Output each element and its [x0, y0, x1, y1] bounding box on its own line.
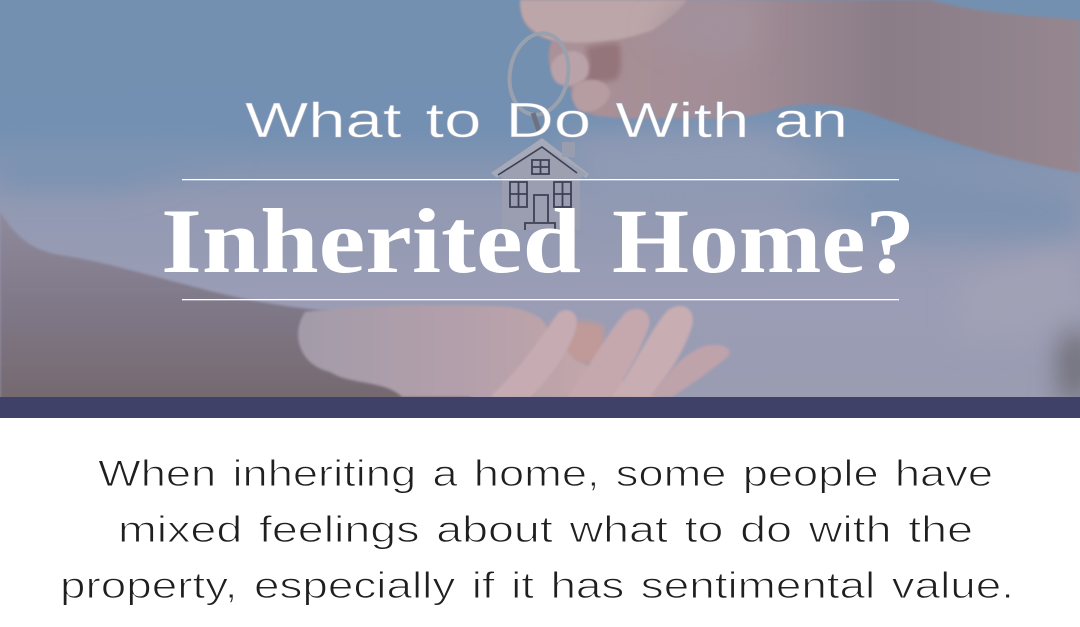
roof line — [498, 147, 577, 175]
index fingertip — [551, 51, 589, 86]
lower finger — [573, 80, 610, 112]
finger four — [650, 345, 729, 397]
lower arm — [0, 212, 480, 400]
house keychain — [491, 138, 589, 230]
open palm — [298, 305, 660, 397]
curled finger shadow — [584, 43, 621, 83]
finger one — [490, 310, 577, 397]
word: Home?: Home? — [612, 190, 915, 292]
accent bar — [0, 397, 1080, 418]
wrist fold highlight — [661, 0, 744, 22]
finger two — [568, 309, 649, 397]
blurred clouds and distant shapes — [0, 125, 1080, 400]
paragraph line two: mixed feelings about what to do with the — [118, 509, 973, 550]
title line two — [161, 190, 915, 292]
door — [534, 195, 548, 222]
intro paragraph — [60, 453, 1014, 606]
chimney — [562, 142, 575, 157]
roof — [491, 138, 589, 178]
paragraph line one: When inheriting a home, some people have — [98, 453, 993, 494]
upper forearm and fist — [521, 0, 1080, 173]
right window — [554, 182, 571, 207]
sky background — [0, 0, 1080, 397]
steps — [525, 223, 555, 230]
top divider — [182, 179, 899, 180]
finger three — [612, 306, 693, 397]
attic window — [532, 160, 549, 174]
title line one: What to Do With an — [245, 94, 848, 148]
hidden middle finger — [550, 321, 604, 364]
paragraph line three: property, especially if it has sentimental value. — [60, 565, 1014, 606]
left window — [510, 182, 527, 207]
word: Inherited: Inherited — [161, 190, 581, 292]
hero photo: hands passing a house key — [0, 0, 1080, 400]
bottom divider — [182, 299, 899, 300]
bottom-left pale patch — [0, 384, 60, 398]
thumb — [520, 0, 687, 43]
key ring — [508, 31, 570, 132]
house body — [502, 178, 580, 208]
